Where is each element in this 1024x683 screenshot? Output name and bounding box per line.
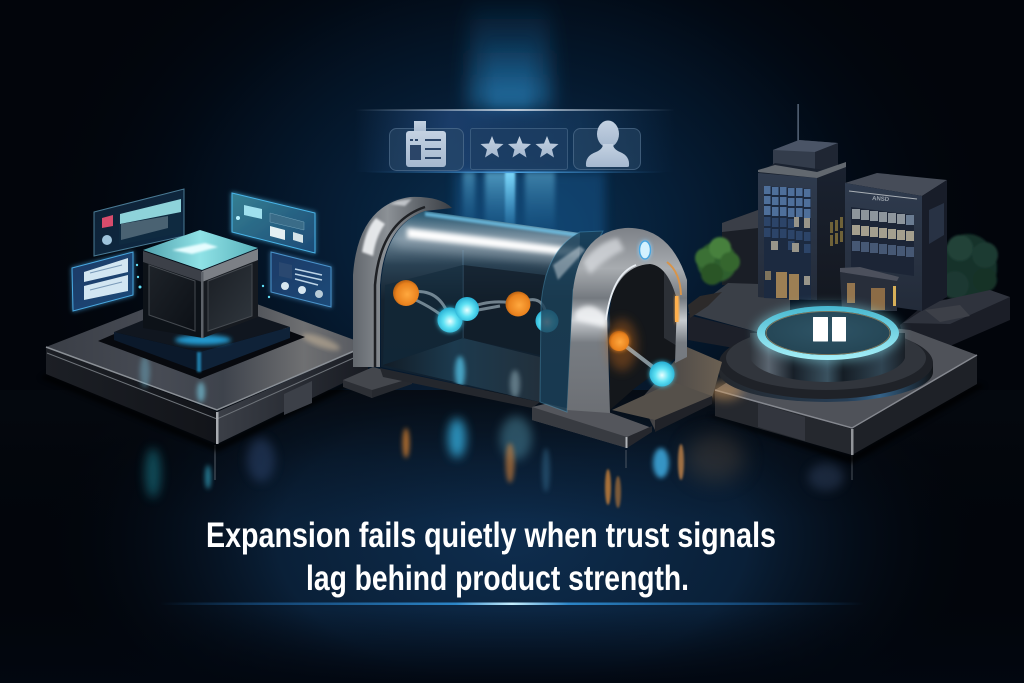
orb — [438, 308, 462, 332]
orb — [650, 362, 674, 386]
panel: person — [574, 120, 640, 170]
tree: right — [939, 234, 998, 302]
dark pedestal — [98, 297, 305, 379]
rear glass, floor — [381, 211, 590, 410]
signal orbs in tunnel — [393, 280, 558, 332]
panel: ID badge — [390, 121, 464, 170]
tree: left — [695, 237, 740, 285]
office tower — [758, 104, 846, 300]
small rear block — [722, 210, 758, 285]
light beams — [455, 0, 605, 244]
orb — [609, 331, 629, 351]
platform body — [40, 285, 375, 452]
takeaway text — [206, 516, 776, 598]
right platform: pause button — [707, 304, 985, 464]
takeaway text: Expansion fails quietly when trust signals — [206, 516, 776, 555]
disc base — [719, 326, 933, 402]
left arch — [353, 197, 452, 367]
icon: pause bars — [813, 317, 846, 342]
divider rule — [160, 602, 864, 605]
takeaway text: lag behind product strength. — [306, 559, 689, 598]
glass cube — [143, 230, 258, 338]
floor reflections — [145, 416, 853, 508]
base slabs — [343, 347, 722, 448]
orb — [455, 297, 479, 321]
ground platform — [688, 283, 1010, 352]
panel: three stars — [470, 128, 568, 170]
raised button — [750, 304, 905, 382]
glass front ring — [540, 231, 603, 412]
right campus: buildings — [688, 104, 1010, 352]
orb — [506, 292, 530, 316]
office annex — [840, 173, 947, 311]
trust signals bar — [355, 109, 675, 173]
orb — [393, 280, 419, 306]
left platform: product cube — [40, 189, 375, 452]
right arch — [567, 228, 687, 413]
platform slab — [707, 320, 985, 464]
orb — [536, 310, 558, 332]
floating UI panels — [72, 189, 331, 311]
office annex: ANSD — [872, 196, 890, 203]
center: glass tunnel — [343, 197, 722, 448]
